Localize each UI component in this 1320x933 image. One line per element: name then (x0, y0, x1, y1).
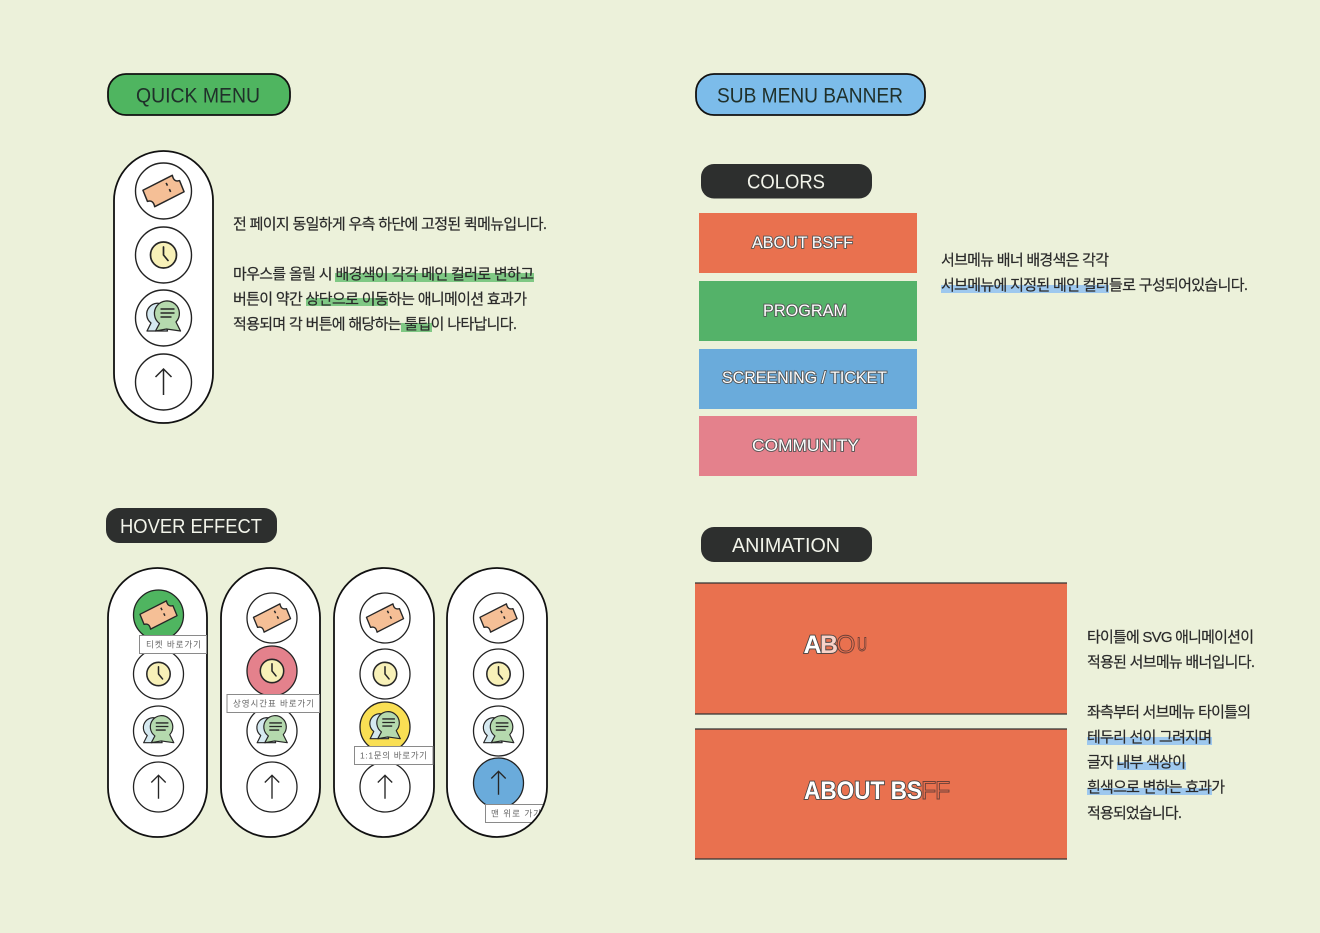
text block: animation description: 적용된 서브메뉴 배너입니다. (1087, 654, 1255, 671)
text block: animation description: 글자 내부 색상이 (1087, 754, 1186, 771)
text block: animation description: 타이틀에 SVG 애니메이션이 (1087, 629, 1254, 646)
text block: colors description: 서브메뉴 배너 배경색은 각각 (941, 252, 1109, 269)
panel: hover state showtimes (221, 568, 320, 837)
button: clock (136, 227, 192, 283)
tooltip: ticket (140, 636, 206, 654)
heading: hover effect: HOVER EFFECT (120, 515, 262, 538)
banner: community: COMMUNITY (752, 437, 859, 455)
panel: hover state ticket (108, 568, 207, 837)
tooltip: inquiry (354, 746, 433, 764)
heading: hover effect (106, 508, 277, 543)
animation frame: early: U (857, 635, 867, 656)
banner: screening / ticket: SCREENING / TICKET (722, 369, 887, 387)
text block: animation description: 적용되었습니다. (1087, 805, 1182, 822)
heading: colors (701, 164, 872, 198)
text block: quick menu description (233, 216, 547, 333)
banner: about bsff: ABOUT BSFF (752, 234, 853, 252)
text block: quick menu description: 전 페이지 동일하게 우측 하단에 고정된 퀵메뉴입니다. (233, 216, 547, 233)
banner: program (699, 281, 917, 341)
heading: quick menu (108, 74, 290, 115)
heading: colors: COLORS (747, 170, 825, 194)
text block: animation description: 흰색으로 변하는 효과가 (1087, 779, 1225, 796)
banner: about bsff (699, 213, 917, 273)
animation frame: late: FF (921, 777, 950, 805)
text block: animation description: 테두리 선이 그려지며 (1087, 729, 1212, 746)
banner: program: PROGRAM (763, 302, 847, 320)
text block: quick menu description: 적용되며 각 버튼에 해당하는 툴팁이 나타납니다. (233, 316, 517, 333)
banner: screening / ticket (699, 349, 917, 409)
button: ticket (136, 163, 192, 219)
text block: quick menu description: 버튼이 약간 상단으로 이동하는 애니메이션 효과가 (233, 291, 527, 308)
banner: community (699, 416, 917, 476)
tooltip: inquiry: 1:1문의 바로가기 (360, 750, 427, 760)
button: to top arrow (136, 354, 192, 410)
panel: hover state to top (447, 568, 547, 837)
panel: hover state inquiry (334, 568, 434, 837)
tooltip: showtimes: 상영시간표 바로가기 (233, 698, 314, 708)
heading: sub menu banner (696, 74, 925, 115)
animation frame: late (695, 729, 1067, 859)
animation frame: early: A (804, 631, 822, 659)
text block: animation description (1087, 629, 1255, 822)
text block: colors description (941, 252, 1248, 294)
text block: quick menu description: 마우스를 올릴 시 배경색이 각각 메인 컬러로 변하고 (233, 266, 534, 283)
panel: quick menu buttons (114, 151, 213, 423)
heading: sub menu banner: SUB MENU BANNER (717, 84, 903, 108)
tooltip: showtimes (227, 694, 320, 712)
animation frame: late: ABOUT BS (804, 777, 922, 805)
tooltip: to top: 맨 위로 가기 (491, 808, 541, 818)
heading: quick menu: QUICK MENU (136, 84, 260, 108)
text block: animation description: 좌측부터 서브메뉴 타이틀의 (1087, 704, 1251, 721)
heading: animation (701, 527, 872, 562)
tooltip: to top (486, 804, 544, 822)
animation frame: early: B (820, 631, 838, 659)
tooltip: ticket: 티켓 바로가기 (146, 640, 201, 650)
text block: colors description: 서브메뉴에 지정된 메인 컬러들로 구성되어있습니다. (941, 277, 1248, 294)
animation frame: early (695, 583, 1067, 714)
button: chat (136, 290, 192, 346)
heading: animation: ANIMATION (732, 534, 840, 557)
animation frame: early: O (836, 631, 855, 659)
